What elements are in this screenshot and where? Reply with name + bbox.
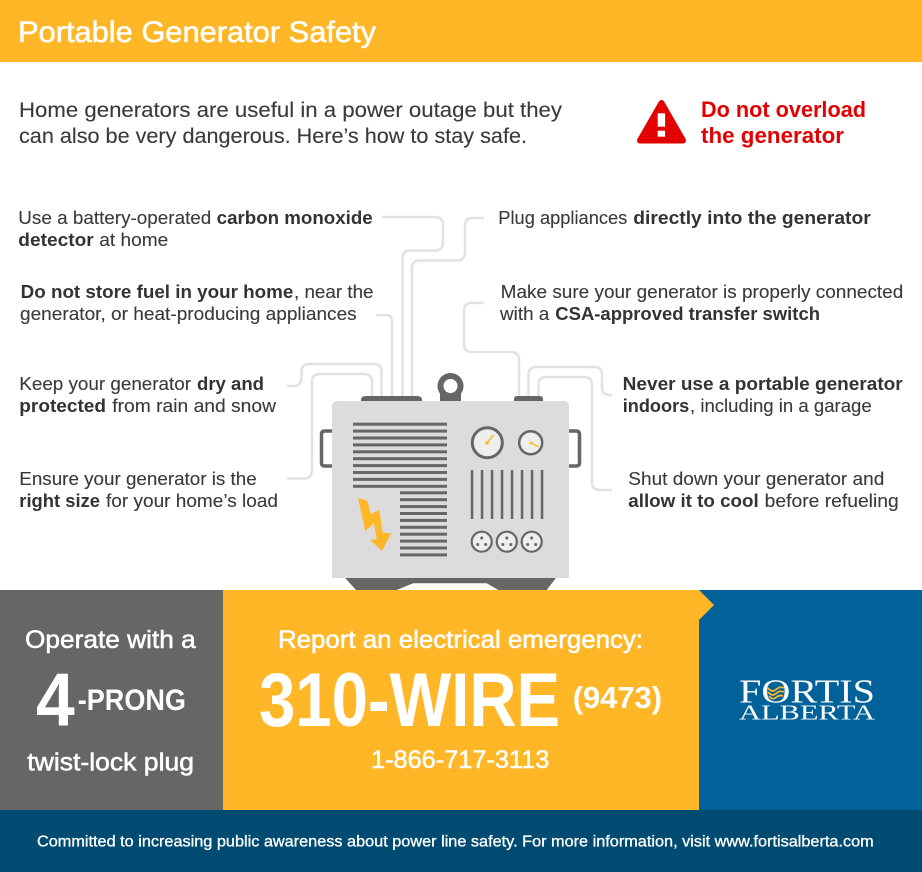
- panel: emergency number: (9473): [573, 680, 662, 715]
- vertical slats: [471, 470, 543, 519]
- warning text: Do not overload: [701, 97, 866, 122]
- tip: cool before refueling: allow it to cool: [628, 490, 759, 511]
- tip: dry and protected: from rain and snow: [112, 395, 277, 416]
- generator illustration: [322, 376, 580, 590]
- tip: fuel storage: [20, 281, 374, 324]
- top caps: [361, 396, 543, 401]
- gauges: [472, 428, 542, 458]
- tip: cool before refueling: [628, 468, 899, 511]
- tip: never indoors: indoors: [623, 395, 689, 416]
- tip: plug appliances directly: Plug appliances: [498, 207, 627, 228]
- panel: emergency number: [223, 590, 714, 810]
- logo: FortisAlberta: [739, 673, 876, 724]
- tip: carbon monoxide detector: at home: [99, 229, 168, 250]
- lifting ring: [440, 376, 461, 401]
- tip: plug appliances directly: [498, 207, 871, 228]
- tip: carbon monoxide detector: carbon monoxide: [217, 207, 373, 228]
- footer: [0, 810, 922, 872]
- warning text: the generator: [701, 123, 844, 148]
- tip: right size: Ensure your generator is the: [19, 468, 257, 489]
- icon: logo waves: [768, 687, 784, 699]
- title banner: [0, 0, 922, 62]
- icon: lightning bolt: [358, 498, 391, 551]
- tip: never indoors: , including in a garage: [690, 395, 872, 416]
- panel: logo background: [699, 590, 922, 810]
- outlets: [472, 532, 542, 552]
- tip: transfer switch: Make sure your generator is properly connected: [501, 281, 903, 302]
- tip: never indoors: Never use a portable generator: [623, 373, 903, 394]
- tip: carbon monoxide detector: detector: [18, 229, 94, 250]
- panel: emergency number: Report an electrical emergency:: [278, 626, 643, 654]
- panel: 4-prong plug: twist-lock plug: [27, 749, 194, 777]
- intro text: can also be very dangerous. Here’s how to stay safe.: [19, 124, 527, 148]
- tip: dry and protected: Keep your generator: [19, 373, 191, 394]
- tip: never indoors: [623, 373, 903, 416]
- warning callout: [640, 97, 866, 148]
- tip: right size: for your home’s load: [106, 490, 278, 511]
- tip: right size: right size: [19, 490, 100, 511]
- intro text: Home generators are useful in a power outage but they: [19, 98, 562, 122]
- tip: fuel storage: , near the: [294, 281, 374, 302]
- tip: fuel storage: generator, or heat-producing appliances: [20, 303, 357, 324]
- generator body: [332, 401, 569, 578]
- tip: right size: [19, 468, 278, 511]
- tip: cool before refueling: before refueling: [765, 490, 899, 511]
- footer: Committed to increasing public awareness about power line safety. For more information, visit www.fortisalberta.com: [37, 834, 874, 851]
- icon: warning triangle: [640, 103, 683, 140]
- tip: dry and protected: protected: [19, 395, 106, 416]
- tip: carbon monoxide detector: Use a battery-operated: [18, 207, 211, 228]
- vent slats: [353, 423, 447, 556]
- tip: transfer switch: [499, 281, 903, 324]
- tip: transfer switch: CSA-approved transfer switch: [555, 303, 820, 324]
- connector lines: [287, 217, 612, 490]
- logo: FortisAlberta: ALBERTA: [739, 700, 876, 724]
- warning text: [701, 97, 866, 148]
- panel: 4-prong plug: 4: [36, 658, 75, 742]
- intro text: [19, 98, 562, 148]
- tip: transfer switch: with a: [499, 303, 550, 324]
- tip: fuel storage: Do not store fuel in your home: [21, 281, 293, 302]
- logo: FortisAlberta: FORTIS: [739, 673, 875, 710]
- feet: [344, 577, 557, 590]
- tip: cool before refueling: Shut down your generator and: [628, 468, 884, 489]
- panel: emergency number: 1-866-717-3113: [371, 746, 549, 774]
- tip: carbon monoxide detector: [18, 207, 373, 250]
- panel: emergency number: 310-WIRE: [259, 658, 560, 743]
- side handles: [322, 431, 580, 466]
- panel: 4-prong plug: [0, 590, 223, 810]
- tip: dry and protected: [19, 373, 277, 416]
- panel: 4-prong plug: -PRONG: [78, 684, 186, 717]
- tip: plug appliances directly: directly into the generator: [633, 207, 871, 228]
- panel: 4-prong plug: Operate with a: [25, 626, 196, 654]
- tip: dry and protected: dry and: [197, 373, 264, 394]
- title: Portable Generator Safety: [18, 16, 376, 49]
